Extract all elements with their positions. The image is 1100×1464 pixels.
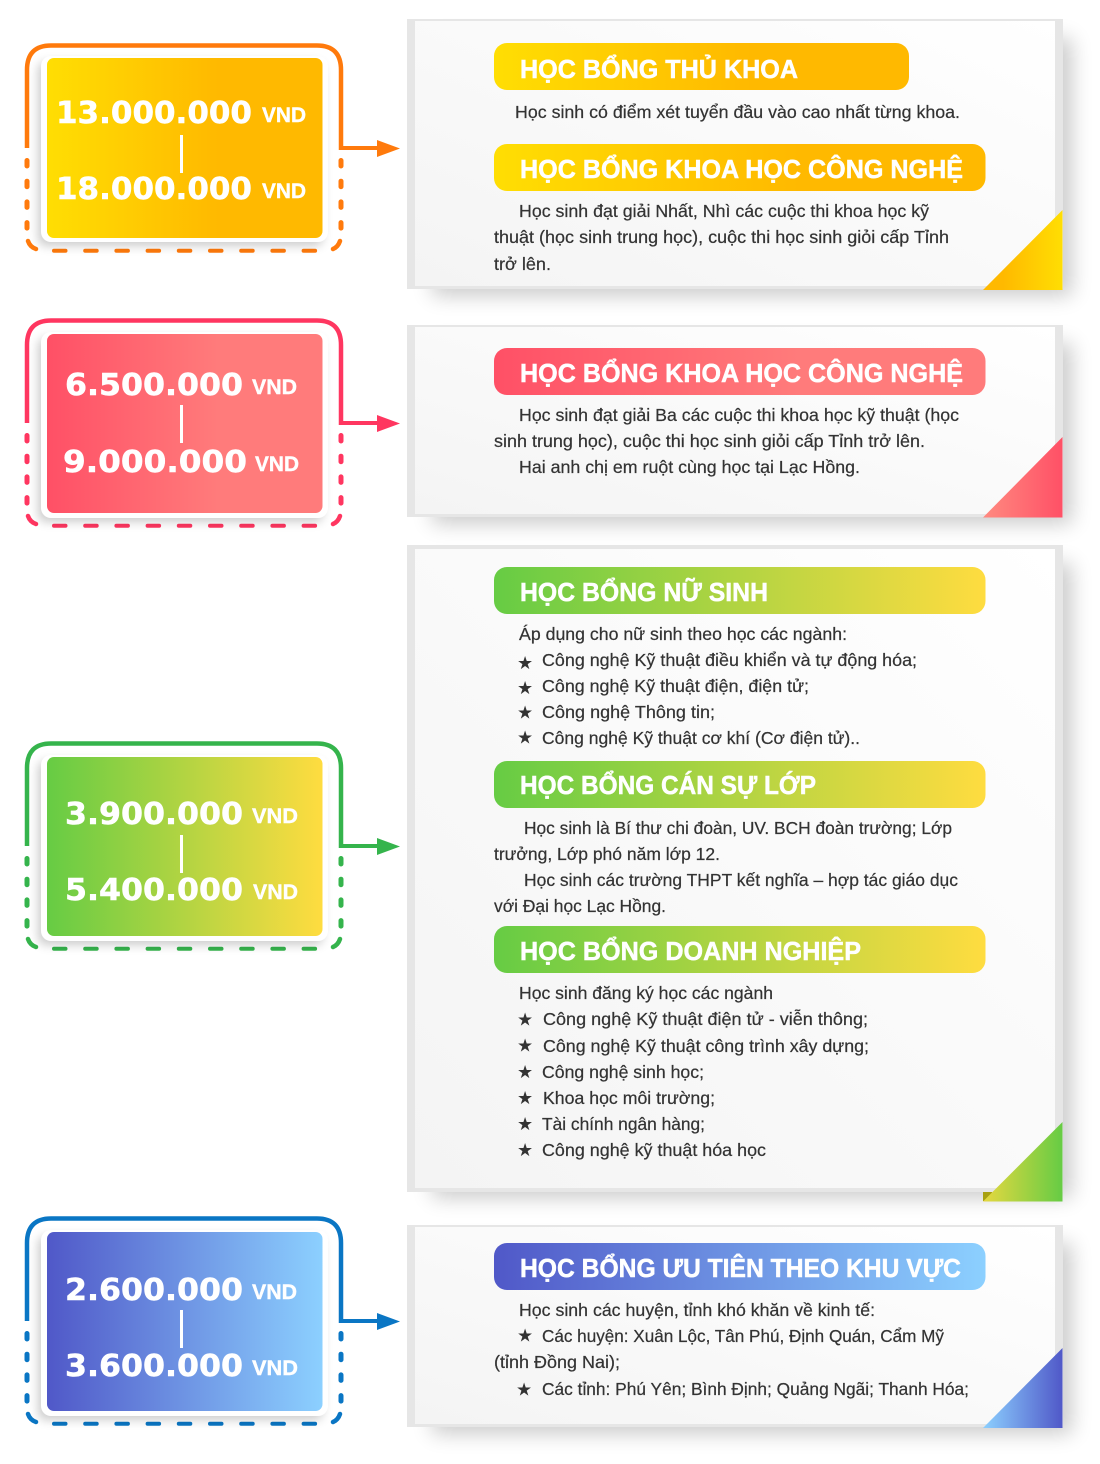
text: doanh nghiệp list: Công nghệ Kỹ thuật điện tử - viễn thông; bbox=[543, 1008, 868, 1029]
text: khoa học công nghệ description bbox=[494, 201, 949, 274]
text: cán sự lớp description bbox=[494, 818, 958, 916]
text: doanh nghiệp list: Học sinh đăng ký học các ngành bbox=[519, 983, 773, 1003]
panel: amount box 2.600.000 - 3.600.000 VND bbox=[27, 1218, 341, 1424]
text: khu vực description bbox=[494, 1300, 969, 1400]
heading: Học bổng nữ sinh bbox=[494, 567, 986, 614]
text: nữ sinh list: ★ bbox=[517, 678, 533, 699]
text: cán sự lớp description: với Đại học Lạc Hồng. bbox=[494, 896, 666, 916]
panel: amount box 13.000.000 - 18.000.000 VND bbox=[27, 46, 341, 251]
text: khu vực description: Học sinh các huyện, tỉnh khó khăn về kinh tế: bbox=[519, 1300, 875, 1320]
text: description: Học sinh đạt giải Ba các cuộc thi khoa học kỹ thuật (học bbox=[519, 405, 959, 425]
heading: Học bổng khoa học công nghệ: HỌC BỔNG KHOA HỌC CÔNG NGHỆ bbox=[520, 154, 963, 184]
text: khoa học công nghệ description: thuật (học sinh trung học), cuộc thi học sinh giỏi cấp Tỉnh bbox=[494, 227, 949, 247]
text: doanh nghiệp list: ★ bbox=[517, 1036, 533, 1056]
text: doanh nghiệp list: Khoa học môi trường; bbox=[543, 1088, 715, 1108]
icon: corner fold bbox=[983, 437, 1062, 518]
text: doanh nghiệp list bbox=[517, 983, 869, 1161]
heading: Học bổng cán sự lớp bbox=[494, 761, 986, 808]
icon: corner fold bbox=[983, 1348, 1062, 1428]
arrow: to third panel bbox=[339, 838, 400, 855]
panel: amount box 6.500.000 - 9.000.000 VND bbox=[27, 320, 341, 526]
text: cán sự lớp description: Học sinh các trường THPT kết nghĩa – hợp tác giáo dục bbox=[524, 870, 958, 890]
heading: Học bổng khoa học công nghệ bbox=[494, 348, 986, 395]
panel: amount box 6.500.000 - 9.000.000 VND: 9.000.000 bbox=[63, 445, 247, 480]
heading: Học bổng ưu tiên theo khu vực: HỌC BỔNG ƯU TIÊN THEO KHU VỰC bbox=[520, 1253, 961, 1283]
text: khu vực description: Các tỉnh: Phú Yên; Bình Định; Quảng Ngãi; Thanh Hóa; bbox=[542, 1379, 969, 1399]
arrow: to fourth panel bbox=[339, 1313, 400, 1330]
arrow: to first panel bbox=[339, 140, 400, 157]
text: thủ khoa description: Học sinh có điểm xét tuyển đầu vào cao nhất từng khoa. bbox=[515, 102, 960, 122]
text: cán sự lớp description: Học sinh là Bí thư chi đoàn, UV. BCH đoàn trường; Lớp bbox=[524, 818, 952, 838]
heading: Học bổng khoa học công nghệ bbox=[494, 144, 986, 191]
heading: Học bổng cán sự lớp: HỌC BỔNG CÁN SỰ LỚP bbox=[520, 770, 816, 800]
panel: amount box 13.000.000 - 18.000.000 VND: VND bbox=[262, 104, 306, 127]
text: khu vực description: ★ bbox=[516, 1380, 532, 1400]
text: nữ sinh list: Công nghệ Kỹ thuật điện, điện tử; bbox=[542, 676, 809, 696]
panel: fourth scholarship card bbox=[407, 1225, 1072, 1434]
panel: amount box 2.600.000 - 3.600.000 VND: 3.600.000 bbox=[65, 1349, 243, 1384]
text: doanh nghiệp list: ★ bbox=[517, 1140, 533, 1161]
heading: Học bổng doanh nghiệp bbox=[494, 926, 986, 973]
text: description: Hai anh chị em ruột cùng học tại Lạc Hồng. bbox=[519, 457, 860, 477]
heading: Học bổng nữ sinh: HỌC BỔNG NỮ SINH bbox=[520, 577, 768, 607]
panel: amount box 2.600.000 - 3.600.000 VND: VND bbox=[252, 1281, 297, 1304]
icon: corner fold bbox=[983, 210, 1062, 290]
heading: Học bổng ưu tiên theo khu vực bbox=[494, 1243, 986, 1290]
panel: second scholarship card bbox=[407, 325, 1072, 524]
arrow: to second panel bbox=[339, 415, 400, 432]
panel: amount box 6.500.000 - 9.000.000 VND: VND bbox=[255, 453, 299, 476]
panel: amount box 3.900.000 - 5.400.000 VND: VND bbox=[252, 805, 298, 828]
text: khu vực description: (tỉnh Đồng Nai); bbox=[494, 1352, 620, 1372]
panel: amount box 3.900.000 - 5.400.000 VND: VND bbox=[253, 881, 298, 904]
text: doanh nghiệp list: Công nghệ Kỹ thuật công trình xây dựng; bbox=[543, 1036, 869, 1056]
panel: amount box 2.600.000 - 3.600.000 VND: 2.600.000 bbox=[65, 1273, 243, 1308]
heading: Học bổng thủ khoa: HỌC BỔNG THỦ KHOA bbox=[520, 53, 798, 84]
text: khoa học công nghệ description: trở lên. bbox=[494, 254, 551, 274]
text: doanh nghiệp list: ★ bbox=[517, 1010, 533, 1030]
panel: amount box 13.000.000 - 18.000.000 VND: 13.000.000 bbox=[56, 96, 252, 131]
text: description bbox=[494, 405, 959, 477]
text: doanh nghiệp list: Tài chính ngân hàng; bbox=[542, 1114, 705, 1134]
heading: Học bổng thủ khoa bbox=[494, 43, 909, 90]
text: description: sinh trung học), cuộc thi học sinh giỏi cấp Tỉnh trở lên. bbox=[494, 431, 925, 451]
panel: amount box 6.500.000 - 9.000.000 VND: 6.500.000 bbox=[65, 368, 243, 403]
panel: amount box 3.900.000 - 5.400.000 VND: 5.400.000 bbox=[65, 873, 243, 908]
panel: third scholarship card bbox=[407, 545, 1072, 1202]
text: cán sự lớp description: trưởng, Lớp phó năm lớp 12. bbox=[494, 844, 720, 864]
text: nữ sinh list: ★ bbox=[517, 702, 533, 724]
text: nữ sinh list: Công nghệ Kỹ thuật cơ khí (Cơ điện tử).. bbox=[542, 728, 860, 748]
panel: amount box 3.900.000 - 5.400.000 VND: 3.900.000 bbox=[65, 797, 243, 832]
text: doanh nghiệp list: ★ bbox=[517, 1062, 533, 1083]
icon: corner fold bbox=[983, 1122, 1062, 1202]
text: nữ sinh list: Công nghệ Kỹ thuật điều khiển và tự động hóa; bbox=[542, 650, 917, 670]
heading: Học bổng khoa học công nghệ: HỌC BỔNG KHOA HỌC CÔNG NGHỆ bbox=[520, 358, 963, 388]
text: khu vực description: Các huyện: Xuân Lộc, Tân Phú, Định Quán, Cẩm Mỹ bbox=[542, 1326, 944, 1346]
text: doanh nghiệp list: ★ bbox=[517, 1114, 533, 1135]
text: nữ sinh list: Công nghệ Thông tin; bbox=[542, 702, 715, 722]
text: nữ sinh list: Áp dụng cho nữ sinh theo học các ngành: bbox=[519, 624, 847, 644]
text: khoa học công nghệ description: Học sinh đạt giải Nhất, Nhì các cuộc thi khoa học kỹ bbox=[519, 201, 929, 221]
heading: Học bổng doanh nghiệp: HỌC BỔNG DOANH NGHIỆP bbox=[520, 936, 861, 966]
text: nữ sinh list bbox=[517, 624, 917, 748]
panel: first scholarship card bbox=[407, 19, 1072, 296]
text: doanh nghiệp list: Công nghệ kỹ thuật hóa học bbox=[542, 1140, 766, 1160]
text: nữ sinh list: ★ bbox=[517, 728, 533, 748]
panel: amount box 13.000.000 - 18.000.000 VND: 18.000.000 bbox=[56, 172, 252, 207]
panel: amount box 2.600.000 - 3.600.000 VND: VND bbox=[252, 1357, 298, 1380]
panel: amount box 13.000.000 - 18.000.000 VND: VND bbox=[262, 180, 306, 203]
panel: amount box 3.900.000 - 5.400.000 VND bbox=[27, 744, 341, 949]
text: nữ sinh list: ★ bbox=[517, 653, 533, 674]
text: doanh nghiệp list: Công nghệ sinh học; bbox=[542, 1062, 704, 1082]
panel: amount box 6.500.000 - 9.000.000 VND: VND bbox=[252, 376, 297, 399]
text: khu vực description: ★ bbox=[517, 1326, 533, 1346]
text: doanh nghiệp list: ★ bbox=[517, 1088, 533, 1109]
